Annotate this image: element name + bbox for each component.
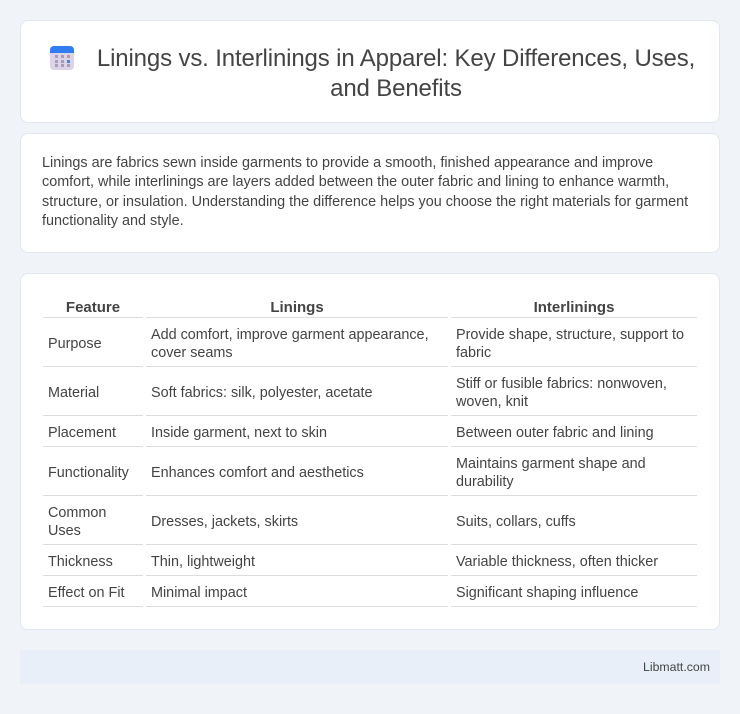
- intro text: comfort, while interlinings are layers added between the outer fabric and lining to enhance warmth,: [42, 174, 669, 190]
- comparison table: fabric: [456, 345, 491, 361]
- comparison table: Significant shaping influence: [456, 585, 638, 601]
- comparison table: woven, knit: [456, 394, 528, 410]
- panel: comparison table card: [20, 273, 720, 630]
- row: common uses: Common: [48, 505, 106, 521]
- comparison table: Maintains garment shape and: [456, 456, 646, 472]
- comparison table: Linings: [270, 299, 324, 316]
- comparison table: Provide shape, structure, support to: [456, 327, 684, 343]
- comparison table: Thin, lightweight: [151, 554, 255, 570]
- comparison table: Uses: [48, 523, 81, 539]
- panel: title card: [20, 20, 720, 123]
- row: thickness: Thickness: [48, 554, 113, 570]
- comparison table: Enhances comfort and aesthetics: [151, 465, 364, 481]
- intro text: [42, 155, 688, 229]
- footer credit: Libmatt.com: [643, 660, 710, 674]
- panel: intro text card: [20, 133, 720, 253]
- intro text: functionality and style.: [42, 213, 184, 229]
- title: and Benefits: [330, 74, 462, 102]
- comparison table: Interlinings: [534, 299, 614, 316]
- comparison table: Stiff or fusible fabrics: nonwoven,: [456, 376, 667, 392]
- comparison table: Between outer fabric and lining: [456, 425, 654, 441]
- comparison table: durability: [456, 474, 514, 490]
- comparison table: Variable thickness, often thicker: [456, 554, 658, 570]
- comparison table: Minimal impact: [151, 585, 247, 601]
- row: placement: Placement: [48, 425, 116, 441]
- comparison table: Add comfort, improve garment appearance,: [151, 327, 429, 343]
- row: effect on fit: Effect on Fit: [48, 585, 125, 601]
- comparison table: Inside garment, next to skin: [151, 425, 327, 441]
- panel: footer bar: [20, 650, 720, 684]
- icon: calendar: [50, 46, 74, 70]
- comparison table: cover seams: [151, 345, 233, 361]
- row: functionality: Functionality: [48, 465, 129, 481]
- comparison table: Soft fabrics: silk, polyester, acetate: [151, 385, 373, 401]
- table header: Feature: [66, 299, 120, 316]
- comparison table: [43, 299, 697, 607]
- intro text: structure, or insulation. Understanding the difference helps you choose the right materials for garment: [42, 194, 688, 210]
- title: [97, 45, 695, 102]
- comparison table: Suits, collars, cuffs: [456, 514, 576, 530]
- comparison table: Dresses, jackets, skirts: [151, 514, 298, 530]
- row: purpose: Purpose: [48, 336, 102, 352]
- row: material: Material: [48, 385, 99, 401]
- intro text: Linings are fabrics sewn inside garments to provide a smooth, finished appearance and improve: [42, 155, 653, 171]
- title: Linings vs. Interlinings in Apparel: Key Differences, Uses,: [97, 45, 695, 72]
